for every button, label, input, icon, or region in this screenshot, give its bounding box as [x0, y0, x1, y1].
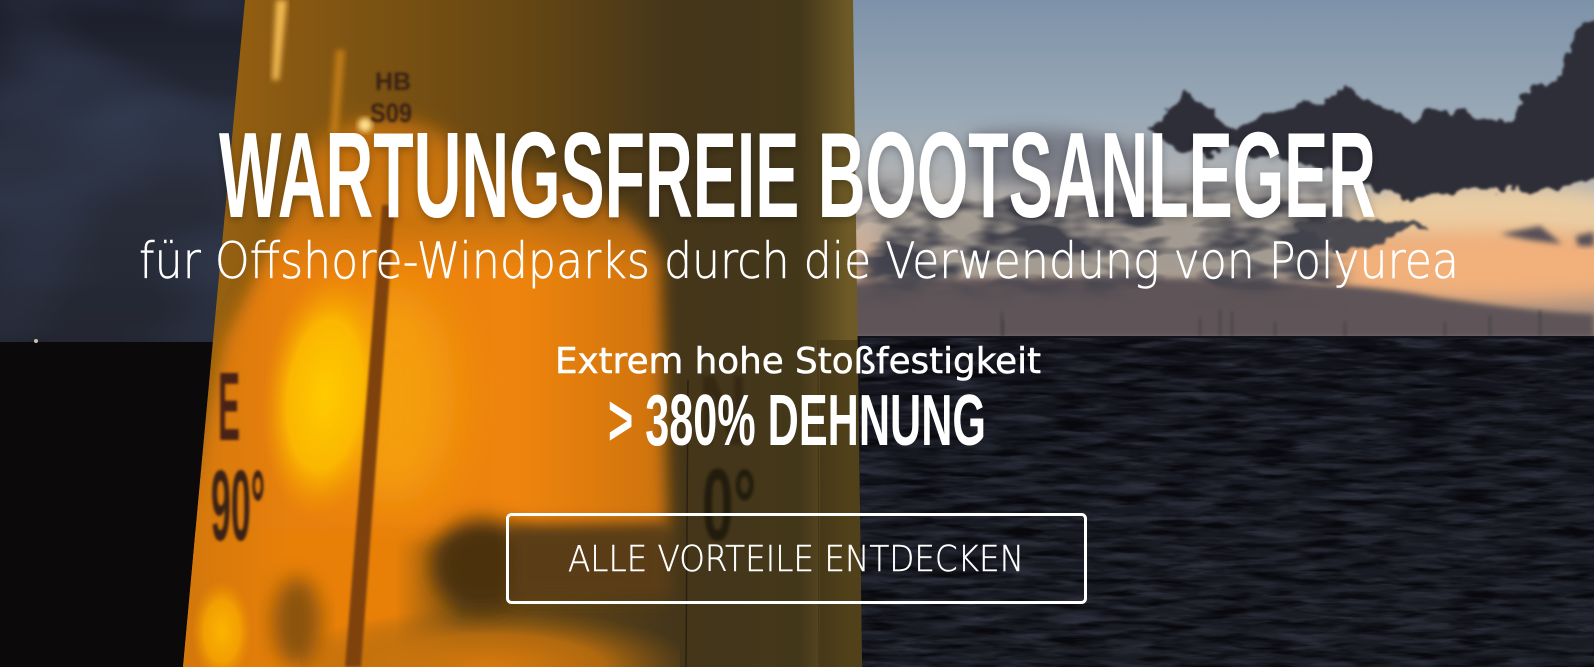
wave shadows — [860, 338, 1594, 667]
mottled mid clouds — [860, 190, 1340, 290]
sky cloud texture, left — [0, 0, 260, 343]
pale light behind mid clouds — [880, 195, 1340, 285]
brown shadow right of blob — [510, 525, 670, 600]
dark sea, left — [0, 342, 240, 667]
tower marking: HB S09: HB — [375, 68, 411, 96]
sunset clouds — [850, 20, 1594, 338]
tower marking: N: N — [699, 355, 747, 467]
button outline — [508, 514, 1086, 602]
orange glow around marking — [305, 120, 465, 220]
button label: ALLE VORTEILE ENTDECKEN — [568, 539, 1024, 580]
amber core — [335, 285, 455, 505]
peach glow — [1280, 231, 1594, 299]
seam line — [686, 380, 688, 667]
orange glow — [178, 115, 668, 550]
dusk sky, left — [0, 0, 260, 343]
wind turbines on horizon — [1002, 310, 1540, 336]
tower base colour — [170, 0, 870, 667]
benefit line: Extrem hohe Stoßfestigkeit — [555, 341, 1041, 382]
tower marking: E 90° — [211, 352, 265, 562]
bright spot near marking — [358, 118, 372, 132]
dark shadow patch, lower — [273, 577, 321, 667]
lower cloud bank — [850, 277, 1594, 338]
subtitle: für Offshore-Windparks durch die Verwendung von Polyurea — [139, 232, 1459, 290]
small cloud strip — [1300, 219, 1430, 250]
button — [508, 514, 1086, 602]
pale band under the cloud — [1340, 185, 1594, 245]
tower marking: HB S09: S09 — [370, 98, 412, 128]
dark shadow blob — [432, 519, 532, 611]
orange lower band — [183, 530, 463, 667]
haze behind title — [970, 130, 1150, 188]
yellow hot spot — [268, 284, 370, 506]
main dark cloud — [1147, 20, 1594, 198]
tower marking: HB S09 — [370, 68, 412, 128]
amber streak — [330, 50, 345, 135]
wisps — [1500, 226, 1594, 246]
dark sea, right — [840, 336, 1594, 667]
key figure: > 380% DEHNUNG — [608, 381, 986, 461]
sunset sky, right — [840, 0, 1594, 338]
lower right dark edge — [820, 340, 865, 667]
seam line, right — [818, 340, 819, 667]
bright specular streak — [272, 0, 287, 80]
background photo: 90° — [211, 450, 265, 562]
lower yellow reflection — [196, 588, 248, 667]
yellow tower — [170, 0, 870, 667]
vertical strap — [345, 205, 395, 667]
tower marking: E 90°: E — [218, 352, 240, 461]
tower marking: 0°: 0° — [702, 448, 756, 562]
distant light on horizon — [34, 339, 38, 343]
orange bottom glow — [300, 614, 680, 667]
wave highlights — [860, 338, 1594, 667]
